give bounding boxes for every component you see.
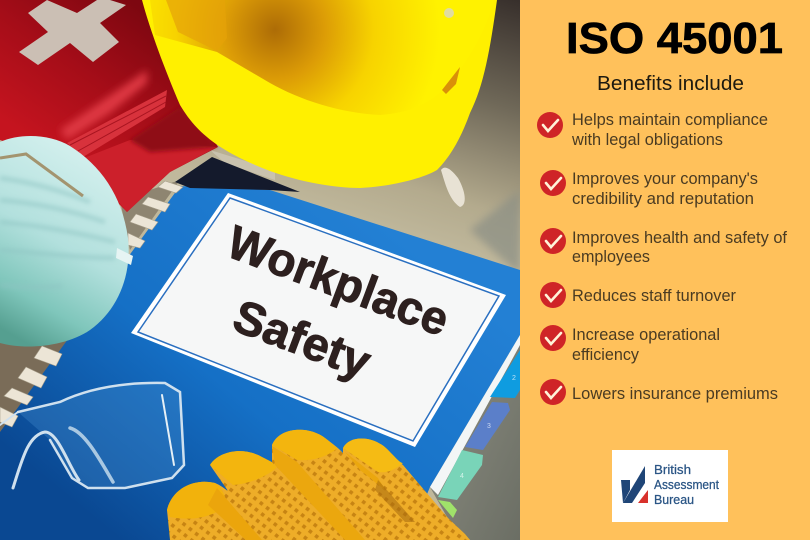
benefit: compliance: Helps maintain compliance <box>572 110 768 129</box>
benefit: insurance premiums: Lowers insurance premiums <box>572 384 778 403</box>
white label <box>131 193 506 447</box>
benefit: health and safety <box>540 228 787 266</box>
label text: Safety <box>226 289 378 388</box>
benefit: compliance <box>537 110 768 149</box>
icon: check badge <box>540 170 566 196</box>
yellow work gloves <box>167 430 470 540</box>
icon: check badge <box>537 112 563 138</box>
icon: logo tick mark <box>621 466 648 503</box>
nose strip <box>0 154 83 196</box>
label text: Workplace <box>220 215 456 346</box>
index tabs: 2 <box>512 375 516 382</box>
benefit: compliance: with legal obligations <box>571 130 723 149</box>
benefit: operational efficiency: Increase operational <box>572 325 720 344</box>
safety glasses <box>0 383 184 488</box>
icon: check badge <box>540 379 566 405</box>
logo text: Bureau <box>654 493 694 507</box>
photo background surface <box>0 0 520 540</box>
benefit: health and safety: employees <box>572 247 650 266</box>
spiral binding <box>0 181 183 427</box>
icon: check badge <box>540 228 566 254</box>
logo text: Assessment <box>654 478 719 492</box>
blue binder <box>0 157 520 540</box>
benefit: credibility: credibility and reputation <box>572 189 754 208</box>
benefit: staff turnover <box>540 282 736 308</box>
benefit: health and safety: Improves health and safety of <box>572 228 787 247</box>
panel: benefits background <box>520 0 810 540</box>
subtitle: Benefits include <box>597 73 744 95</box>
benefit: credibility <box>540 169 758 208</box>
icon: check badge <box>540 325 566 351</box>
benefit: credibility: Improves your company's <box>572 169 758 188</box>
title: ISO 45001 <box>566 14 783 63</box>
index tabs <box>438 350 520 518</box>
benefit: staff turnover: Reduces staff turnover <box>572 286 736 305</box>
panel: safety equipment photo <box>0 0 520 540</box>
logo: British Assessment Bureau <box>612 450 728 522</box>
benefit: insurance premiums <box>540 379 778 405</box>
index tabs: 3 <box>487 423 491 430</box>
logo text: British <box>654 463 691 477</box>
dust mask <box>0 136 133 347</box>
zipper <box>67 90 167 157</box>
benefit: operational efficiency: efficiency <box>572 345 639 364</box>
benefit: operational efficiency <box>540 325 720 364</box>
white cross <box>19 0 126 65</box>
yellow hard hat <box>142 0 497 207</box>
red first aid bag <box>0 0 218 212</box>
index tabs: 4 <box>460 473 464 480</box>
white page edge <box>430 335 520 495</box>
icon: check badge <box>540 282 566 308</box>
hat reflection on surface <box>441 168 465 207</box>
